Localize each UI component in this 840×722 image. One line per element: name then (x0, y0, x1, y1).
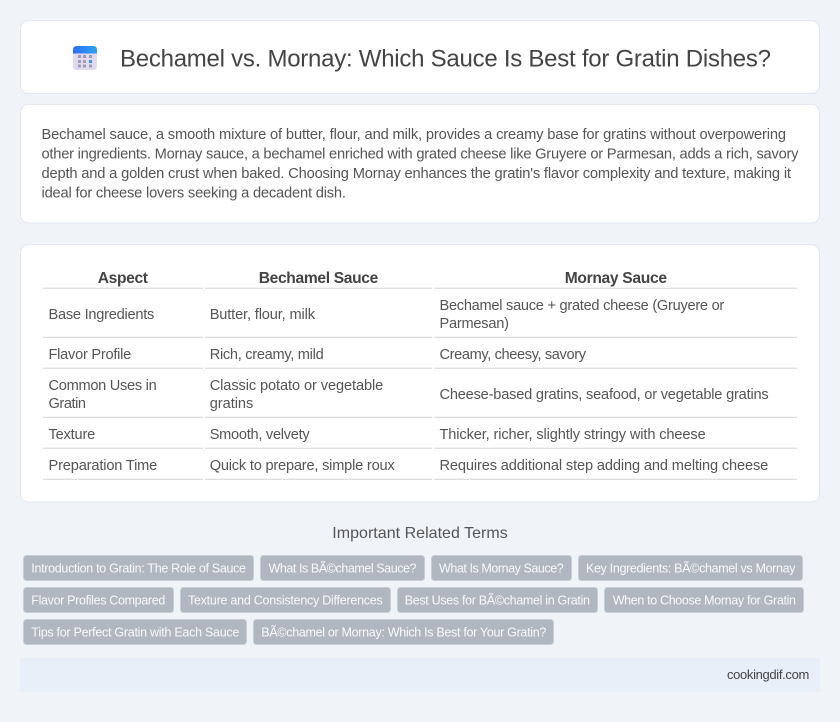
row: common uses in gratin: gratins (210, 396, 253, 412)
footer: cookingdif.com (727, 667, 809, 682)
row: base ingredients: Base Ingredients (48, 307, 154, 323)
table header: Bechamel Sauce (259, 270, 379, 287)
intro text: other ingredients. Mornay sauce, a bechamel enriched with grated cheese like Gruyere or Parmesan, adds a rich, savory (42, 146, 799, 162)
intro text (42, 127, 799, 202)
related term tags: Texture and Consistency Differences (188, 593, 383, 607)
row: preparation time: Preparation Time (48, 458, 157, 474)
panel: introduction (20, 104, 820, 223)
row: common uses in gratin: Gratin (48, 396, 86, 412)
intro text: ideal for cheese lovers seeking a decadent dish. (42, 186, 346, 202)
row: base ingredients: Butter, flour, milk (210, 307, 316, 323)
table header: Aspect (98, 270, 148, 287)
row: base ingredients: Bechamel sauce + grated cheese (Gruyere or (440, 298, 724, 314)
row: texture: Smooth, velvety (210, 427, 310, 443)
row: base ingredients (43, 298, 797, 337)
row: common uses in gratin: Classic potato or vegetable (210, 378, 383, 394)
intro text: Bechamel sauce, a smooth mixture of butter, flour, and milk, provides a creamy base for gratins without overpowering (42, 127, 786, 143)
row: common uses in gratin: Common Uses in (48, 378, 157, 394)
related term tags: BÃ©chamel or Mornay: Which Is Best for Your Gratin? (261, 625, 546, 639)
row: flavor profile (43, 347, 797, 368)
table header (43, 270, 797, 288)
icon: calendar (73, 46, 97, 70)
related term tags (24, 556, 804, 644)
row: preparation time: Quick to prepare, simple roux (210, 458, 395, 474)
row: common uses in gratin (43, 378, 797, 417)
related term tags: Tips for Perfect Gratin with Each Sauce (31, 625, 239, 639)
related term tags: What Is BÃ©chamel Sauce? (268, 561, 417, 575)
related term tags: When to Choose Mornay for Gratin (613, 593, 796, 607)
related term tags: Introduction to Gratin: The Role of Sauce (31, 561, 246, 575)
intro text: depth and a golden crust when baked. Choosing Mornay enhances the gratin's flavor complexity and texture, making it (42, 166, 791, 182)
related term tags: Best Uses for BÃ©chamel in Gratin (405, 593, 590, 607)
row: preparation time: Requires additional step adding and melting cheese (440, 458, 768, 474)
panel: comparison table (20, 244, 820, 502)
related term tags: What Is Mornay Sauce? (439, 561, 564, 575)
panel: header (20, 20, 820, 94)
heading: related terms: Important Related Terms (332, 525, 508, 542)
row: flavor profile: Rich, creamy, mild (210, 347, 324, 363)
footer (20, 658, 820, 692)
row: texture: Thicker, richer, slightly stringy with cheese (440, 427, 706, 443)
row: texture: Texture (48, 427, 95, 443)
related term tags: Flavor Profiles Compared (31, 593, 165, 607)
related term tags: Key Ingredients: BÃ©chamel vs Mornay (586, 561, 796, 575)
row: flavor profile: Flavor Profile (48, 347, 131, 363)
row: texture (43, 427, 797, 448)
row: base ingredients: Parmesan) (440, 316, 509, 332)
table header: Mornay Sauce (565, 270, 667, 287)
title: Bechamel vs. Mornay: Which Sauce Is Best for Gratin Dishes? (120, 46, 771, 72)
row: flavor profile: Creamy, cheesy, savory (440, 347, 587, 363)
row: preparation time (43, 458, 797, 479)
row: common uses in gratin: Cheese-based gratins, seafood, or vegetable gratins (440, 387, 769, 403)
